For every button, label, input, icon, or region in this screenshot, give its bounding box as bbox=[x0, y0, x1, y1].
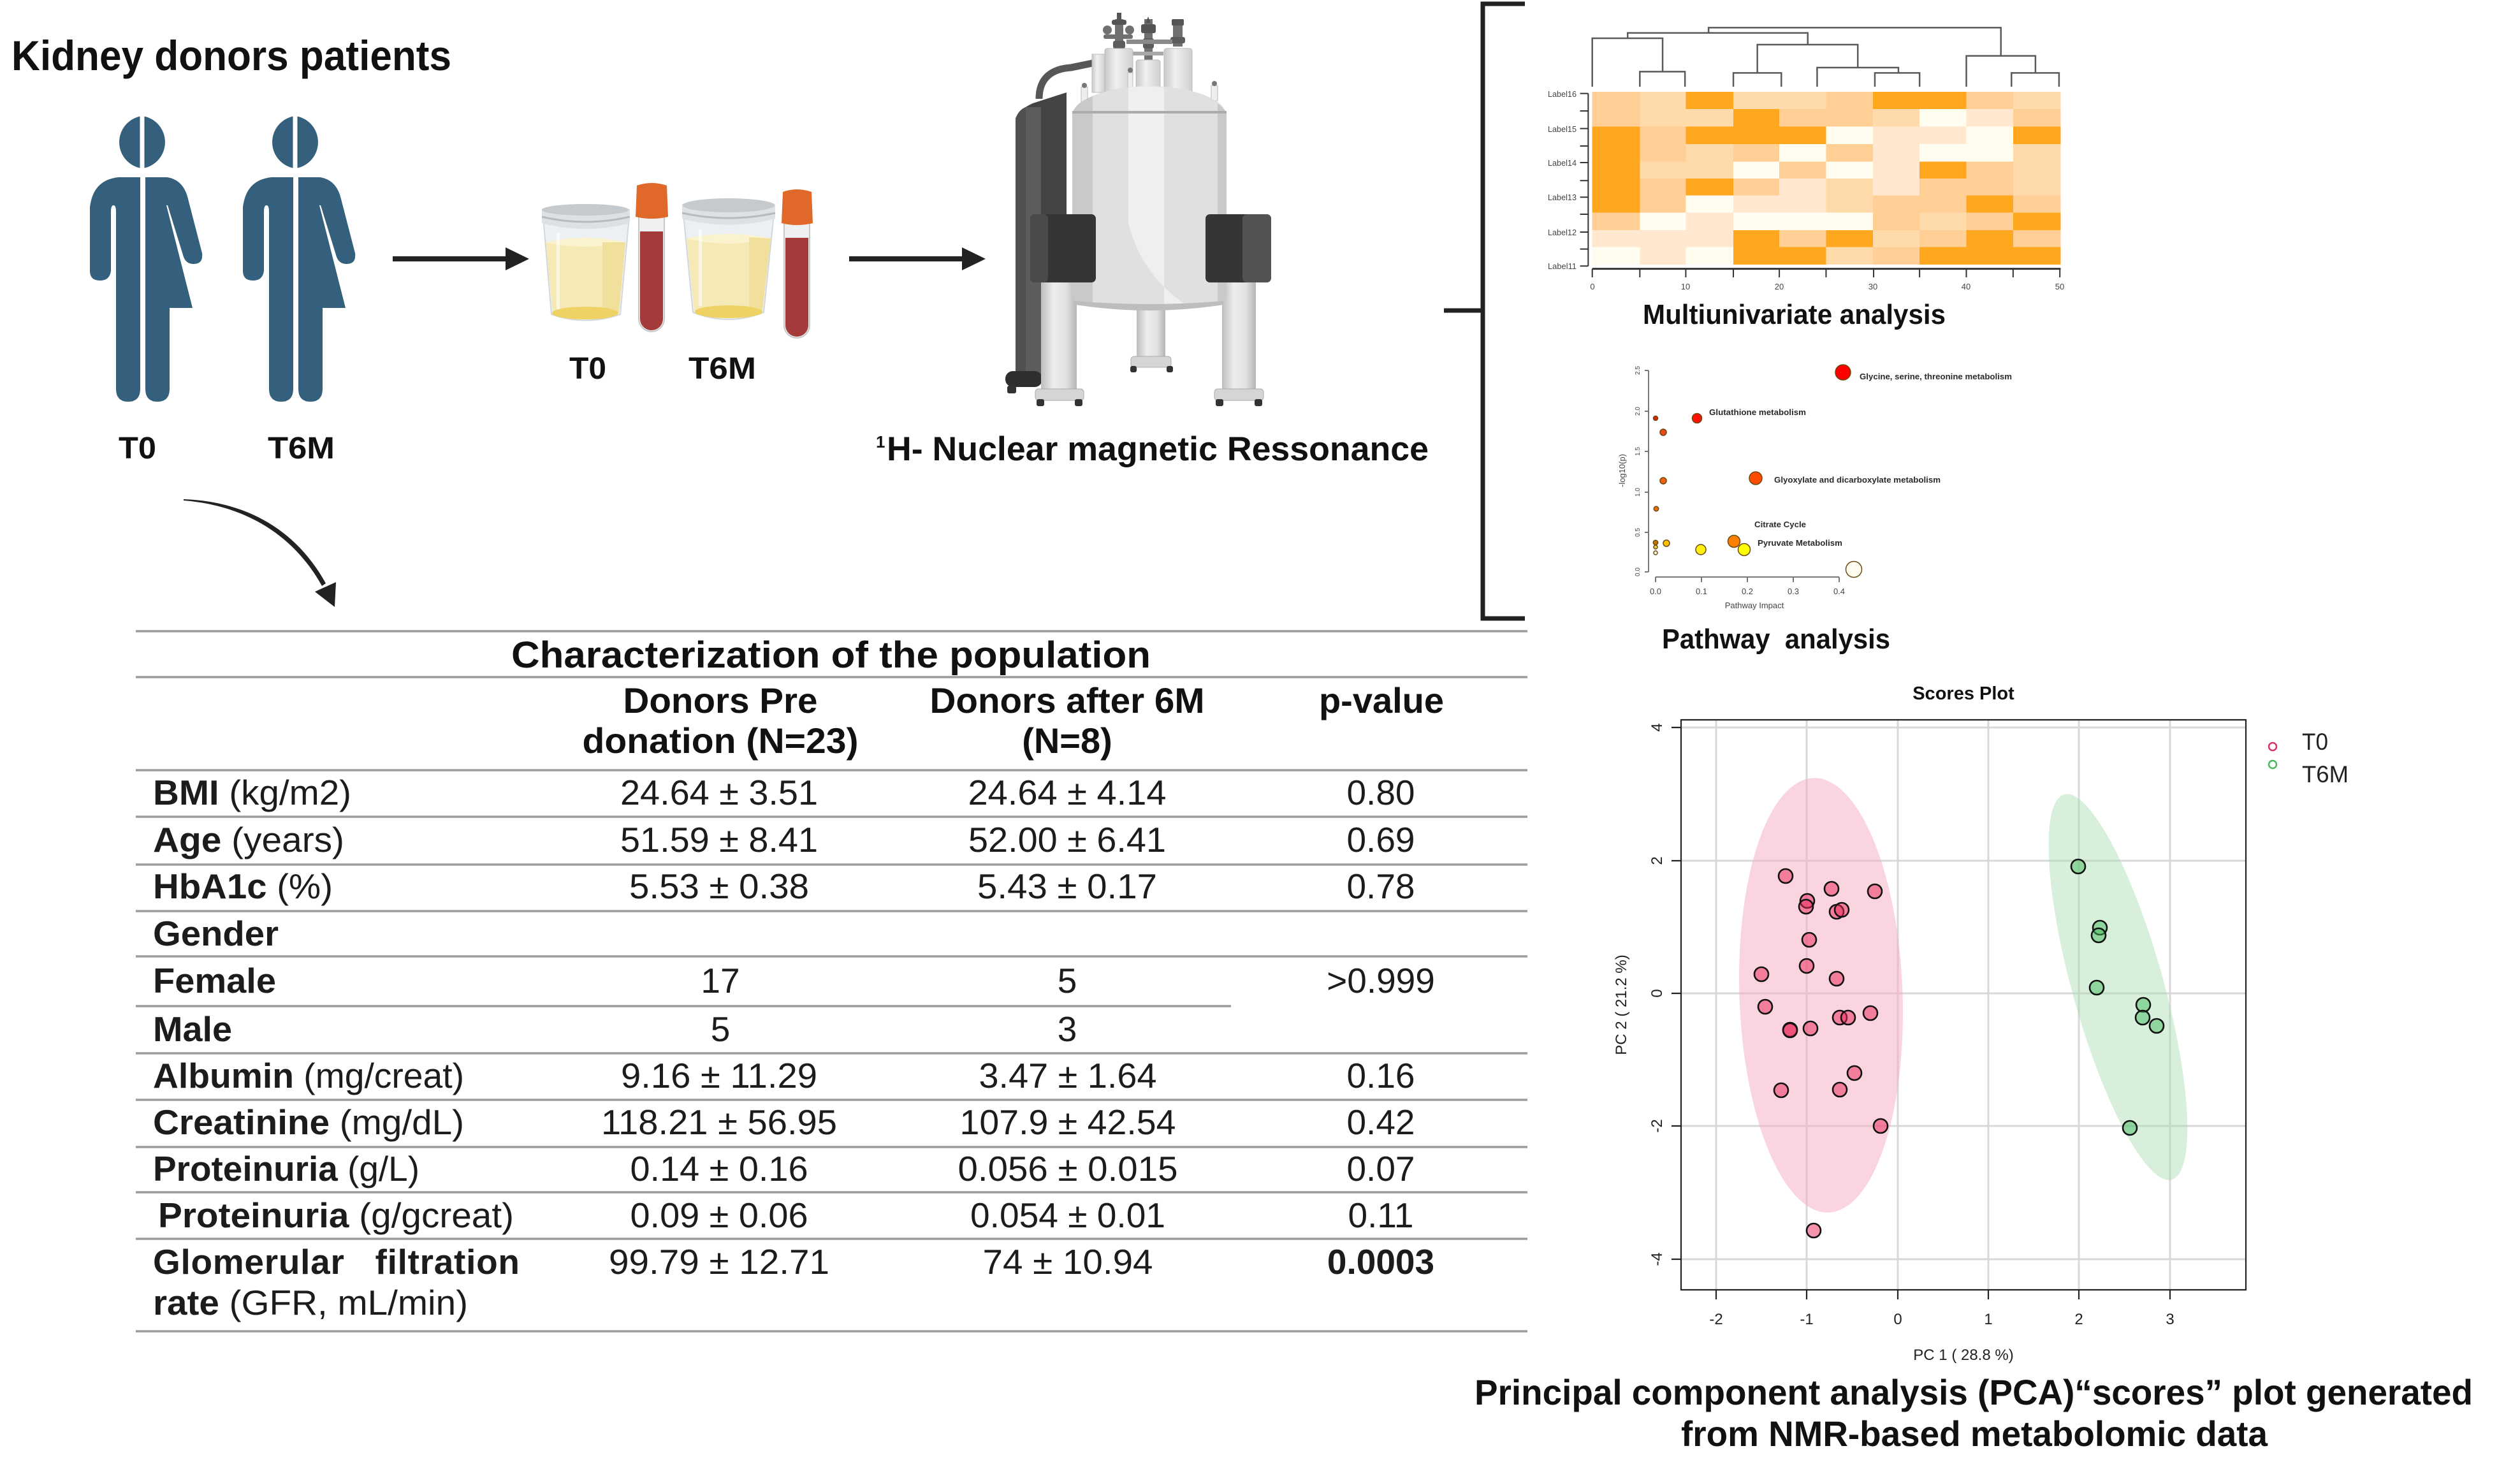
row: Albumin: 9.16 ± 11.29 bbox=[621, 1056, 817, 1095]
dendrogram bbox=[1592, 27, 2059, 87]
row: Proteinuria g/gcreat: 0.11 bbox=[1348, 1195, 1413, 1235]
heatmap row labels: Label16 bbox=[1548, 89, 1577, 99]
label: Pathway analysis: Pathway analysis bbox=[1662, 624, 1890, 655]
y tick labels bbox=[1649, 723, 1666, 1266]
row: Albumin: 0.16 bbox=[1346, 1056, 1415, 1095]
pathway labels: Glutathione metabolism bbox=[1709, 407, 1806, 417]
heatmap row labels: Label14 bbox=[1548, 158, 1577, 168]
column headers: donation (N=23) bbox=[583, 720, 858, 761]
heatmap x ticks bbox=[1590, 282, 2064, 291]
pathway axis labels: 1.0 bbox=[1635, 488, 1642, 497]
heatmap x ticks: 50 bbox=[2055, 282, 2064, 291]
row: Male: Male bbox=[153, 1009, 232, 1049]
panel: patient figures bbox=[90, 116, 355, 465]
y tick labels: 0 bbox=[1649, 989, 1666, 998]
heatmap row labels: Label13 bbox=[1548, 193, 1577, 202]
heatmap row labels: Label11 bbox=[1548, 261, 1577, 271]
row: HbA1c bbox=[153, 866, 1415, 906]
icon: blood tube T0 bbox=[636, 183, 668, 332]
row: Male: 5 bbox=[711, 1009, 730, 1049]
column headers: Donors after 6M bbox=[929, 680, 1205, 720]
row: Proteinuria g/L: 0.056 ± 0.015 bbox=[958, 1149, 1178, 1188]
row: Glomerular filtration rate: rate (GFR, mL/min) bbox=[153, 1283, 468, 1322]
row: Creatinine: 0.42 bbox=[1346, 1102, 1415, 1142]
row: Glomerular filtration rate: 74 ± 10.94 bbox=[983, 1242, 1153, 1282]
heatmap x ticks: 0 bbox=[1590, 282, 1595, 291]
row: HbA1c: HbA1c (%) bbox=[153, 866, 333, 906]
column headers: Donors Pre bbox=[623, 680, 817, 720]
title: Kidney donors patients: Kidney donors patients bbox=[11, 32, 451, 79]
blocks bbox=[1030, 214, 1096, 282]
row: Proteinuria g/L: 0.14 ± 0.16 bbox=[630, 1149, 808, 1188]
row: Age: Age (years) bbox=[153, 820, 344, 859]
plot frame and ticks bbox=[1672, 720, 2246, 1299]
pathway labels bbox=[1709, 372, 2012, 548]
table rules bbox=[136, 631, 1527, 1331]
row: Creatinine: 118.21 ± 56.95 bbox=[601, 1102, 837, 1142]
row: Glomerular filtration rate: 99.79 ± 12.71 bbox=[609, 1242, 829, 1282]
heatmap row labels: Label12 bbox=[1548, 228, 1577, 237]
pathway labels: Glyoxylate and dicarboxylate metabolism bbox=[1774, 475, 1941, 485]
T6M points bbox=[2071, 859, 2164, 1135]
row: Proteinuria g/L: 0.07 bbox=[1346, 1149, 1415, 1188]
row: BMI: 24.64 ± 4.14 bbox=[968, 773, 1167, 812]
row: Creatinine: 107.9 ± 42.54 bbox=[960, 1102, 1176, 1142]
x axis title: PC 1 ( 28.8 %) bbox=[1913, 1347, 2014, 1364]
pathway axes bbox=[1645, 370, 1839, 582]
x tick labels: 2 bbox=[2074, 1311, 2083, 1328]
label: T6M: T6M bbox=[688, 352, 756, 386]
y tick labels: 4 bbox=[1649, 723, 1666, 732]
heatmap row labels: Label15 bbox=[1548, 124, 1577, 134]
label: T6M: T6M bbox=[268, 432, 335, 465]
row: HbA1c: 0.78 bbox=[1346, 866, 1415, 906]
grid bbox=[1681, 720, 2246, 1290]
pathway axis labels bbox=[1617, 366, 1845, 610]
row: Creatinine bbox=[153, 1102, 1415, 1142]
legend: T6M bbox=[2302, 761, 2349, 787]
pathway axis labels: 0.0 bbox=[1635, 567, 1642, 576]
icon: urine cup T0 bbox=[542, 204, 630, 320]
column headers: (N=8) bbox=[1022, 720, 1112, 761]
T0 points bbox=[1754, 869, 1888, 1238]
pathway axis labels: 1.5 bbox=[1635, 447, 1642, 456]
heatmap row labels bbox=[1548, 89, 1577, 271]
x tick labels: 3 bbox=[2166, 1311, 2174, 1328]
caption: PCA scores plot: from NMR-based metabolomic data bbox=[1681, 1414, 2268, 1454]
x tick labels: 0 bbox=[1893, 1311, 1902, 1328]
panel: heatmap bbox=[1548, 27, 2064, 291]
panel: PCA scores plot bbox=[1613, 683, 2349, 1364]
row: Proteinuria g/gcreat bbox=[158, 1195, 1413, 1235]
label: Multiunivariate analysis: Multiunivariate analysis bbox=[1643, 299, 1946, 330]
caption: PCA scores plot: Principal component analysis (PCA)“scores” plot generated bbox=[1475, 1372, 2473, 1412]
column headers: p-value bbox=[1319, 680, 1444, 720]
pathway axis labels: 0.4 bbox=[1833, 587, 1845, 596]
row: Glomerular filtration rate bbox=[153, 1242, 1434, 1322]
row: BMI: BMI (kg/m2) bbox=[153, 773, 351, 812]
heatmap x ticks: 20 bbox=[1775, 282, 1784, 291]
table title: Characterization of the population bbox=[511, 634, 1151, 676]
y axis title: PC 2 ( 21.2 %) bbox=[1613, 954, 1630, 1055]
pathway bubbles bbox=[1653, 365, 1861, 578]
row: Female: Female bbox=[153, 961, 276, 1000]
pathway axis labels: 0.0 bbox=[1650, 587, 1661, 596]
row: Creatinine: Creatinine (mg/dL) bbox=[153, 1102, 464, 1142]
panel: characterization table bbox=[136, 631, 1527, 1331]
label: 1H Nuclear magnetic Ressonance: H- Nuclear magnetic Ressonance bbox=[887, 430, 1429, 468]
tank bbox=[1072, 86, 1227, 305]
pathway labels: Pyruvate Metabolism bbox=[1758, 538, 1842, 548]
arrow: patients to samples bbox=[393, 247, 529, 270]
curved arrow to table bbox=[184, 499, 336, 607]
row: Proteinuria g/gcreat: Proteinuria (g/gcreat) bbox=[158, 1195, 514, 1235]
pathway axis labels: 0.1 bbox=[1696, 587, 1707, 596]
row: Glomerular filtration rate: 0.0003 bbox=[1327, 1242, 1434, 1282]
row: Female bbox=[153, 961, 1435, 1000]
pathway axis labels: 0.2 bbox=[1742, 587, 1753, 596]
legend bbox=[2269, 729, 2349, 787]
row: Male: 3 bbox=[1058, 1009, 1077, 1049]
row: Female: >0.999 bbox=[1327, 961, 1435, 1000]
plot title: Scores Plot bbox=[1912, 683, 2014, 704]
heatmap x ticks: 10 bbox=[1681, 282, 1690, 291]
heatmap axes bbox=[1580, 94, 2060, 277]
pathway axis labels: 2.0 bbox=[1635, 407, 1642, 416]
pathway labels: Citrate Cycle bbox=[1754, 520, 1806, 529]
row: Albumin bbox=[153, 1056, 1415, 1095]
x tick labels: -1 bbox=[1800, 1311, 1814, 1328]
arrow: samples to NMR bbox=[849, 247, 986, 270]
row: Proteinuria g/gcreat: 0.054 ± 0.01 bbox=[970, 1195, 1165, 1235]
row: Age: 51.59 ± 8.41 bbox=[620, 820, 818, 859]
icon: NMR spectrometer bbox=[1005, 13, 1271, 406]
label: 1H Nuclear magnetic Ressonance: 1 bbox=[876, 432, 885, 451]
icon: blood tube T6M bbox=[782, 189, 813, 338]
T6M confidence ellipse bbox=[2020, 782, 2216, 1192]
row: Proteinuria g/gcreat: 0.09 ± 0.06 bbox=[630, 1195, 808, 1235]
column headers bbox=[583, 680, 1444, 761]
row: Age bbox=[153, 820, 1415, 859]
row: Glomerular filtration rate: Glomerular filtration bbox=[153, 1242, 520, 1282]
row: HbA1c: 5.43 ± 0.17 bbox=[977, 866, 1157, 906]
row: Age: 52.00 ± 6.41 bbox=[968, 820, 1166, 859]
icon: urine cup T6M bbox=[682, 198, 775, 319]
label: T0: T0 bbox=[569, 352, 606, 386]
panel: urine and blood samples bbox=[542, 183, 813, 386]
icon: patient figure T0 bbox=[90, 116, 202, 402]
row: Female: 5 bbox=[1058, 961, 1077, 1000]
row: BMI bbox=[153, 773, 1415, 812]
row: Age: 0.69 bbox=[1346, 820, 1415, 859]
row: Proteinuria g/L: Proteinuria (g/L) bbox=[153, 1149, 419, 1188]
label: T0: T0 bbox=[119, 432, 156, 465]
legs bbox=[1041, 282, 1077, 391]
row: BMI: 0.80 bbox=[1346, 773, 1415, 812]
pathway axis labels: 0.3 bbox=[1788, 587, 1799, 596]
pathway axis labels: 2.5 bbox=[1635, 366, 1642, 375]
y tick labels: 2 bbox=[1649, 856, 1666, 865]
row: BMI: 24.64 ± 3.51 bbox=[620, 773, 818, 812]
row: Albumin: Albumin (mg/creat) bbox=[153, 1056, 464, 1095]
icon: patient figure T6M bbox=[243, 116, 355, 402]
fittings bbox=[1103, 13, 1185, 60]
x tick labels bbox=[1709, 1311, 2174, 1328]
row: HbA1c: 5.53 ± 0.38 bbox=[629, 866, 809, 906]
y tick labels: -4 bbox=[1649, 1252, 1666, 1266]
heatmap cells bbox=[1592, 92, 2060, 265]
y tick labels: -2 bbox=[1649, 1119, 1666, 1133]
x tick labels: 1 bbox=[1984, 1311, 1993, 1328]
heatmap x ticks: 30 bbox=[1868, 282, 1877, 291]
x tick labels: -2 bbox=[1709, 1311, 1723, 1328]
pathway axis labels: -log10(p) bbox=[1617, 454, 1627, 487]
panel: pathway bubble chart bbox=[1617, 365, 2012, 610]
row: Gender: Gender bbox=[153, 914, 279, 953]
row: Proteinuria g/L bbox=[153, 1149, 1415, 1188]
pathway axis labels: Pathway Impact bbox=[1725, 601, 1784, 610]
pathway axis labels: 0.5 bbox=[1635, 528, 1642, 537]
row: Male bbox=[153, 1009, 1077, 1049]
row: Female: 17 bbox=[701, 961, 740, 1000]
T0 confidence ellipse bbox=[1732, 775, 1910, 1215]
bracket connector bbox=[1444, 4, 1525, 618]
heatmap x ticks: 40 bbox=[1962, 282, 1970, 291]
legend: T0 bbox=[2302, 729, 2328, 755]
pathway labels: Glycine, serine, threonine metabolism bbox=[1860, 372, 2012, 381]
row: Albumin: 3.47 ± 1.64 bbox=[979, 1056, 1156, 1095]
caption: PCA scores plot bbox=[1475, 1372, 2473, 1454]
